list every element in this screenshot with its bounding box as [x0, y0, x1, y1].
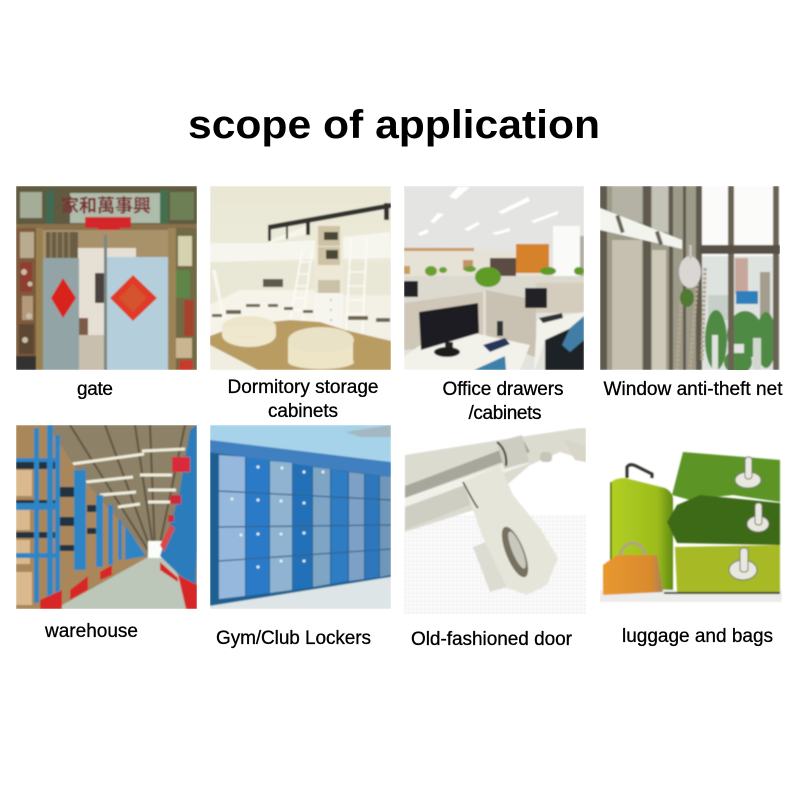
photo: window anti-theft net: [600, 186, 780, 374]
label: office drawers/cabinets: [442, 379, 564, 424]
title: scope of application: [188, 103, 600, 147]
photo: luggage and bags: [600, 452, 782, 602]
photo: gym/club lockers: [210, 425, 391, 609]
photo: gate: [16, 186, 197, 370]
label: gym/club lockers: Gym/Club Lockers: [216, 628, 371, 649]
label: dormitory storage cabinets: Dormitory storage: [228, 377, 378, 398]
photo: office: [404, 186, 584, 372]
photo: warehouse: [16, 425, 197, 609]
label: window anti-theft net: Window anti-theft net: [604, 379, 783, 400]
photo: old-fashioned door hasp: [404, 428, 586, 614]
label: dormitory storage cabinets: cabinets: [268, 401, 338, 422]
label: office drawers/cabinets: Office drawers: [442, 379, 564, 400]
label: warehouse: warehouse: [44, 621, 138, 642]
label: dormitory storage cabinets: [228, 377, 378, 422]
photo: gate: 家和萬事興: [61, 195, 151, 216]
label: old-fashioned door: Old-fashioned door: [411, 629, 573, 650]
photo: dormitory storage cabinets: [210, 186, 391, 370]
label: luggage and bags: luggage and bags: [622, 626, 773, 647]
label: office drawers/cabinets: /cabinets: [468, 403, 542, 424]
label: gate: gate: [77, 379, 113, 400]
